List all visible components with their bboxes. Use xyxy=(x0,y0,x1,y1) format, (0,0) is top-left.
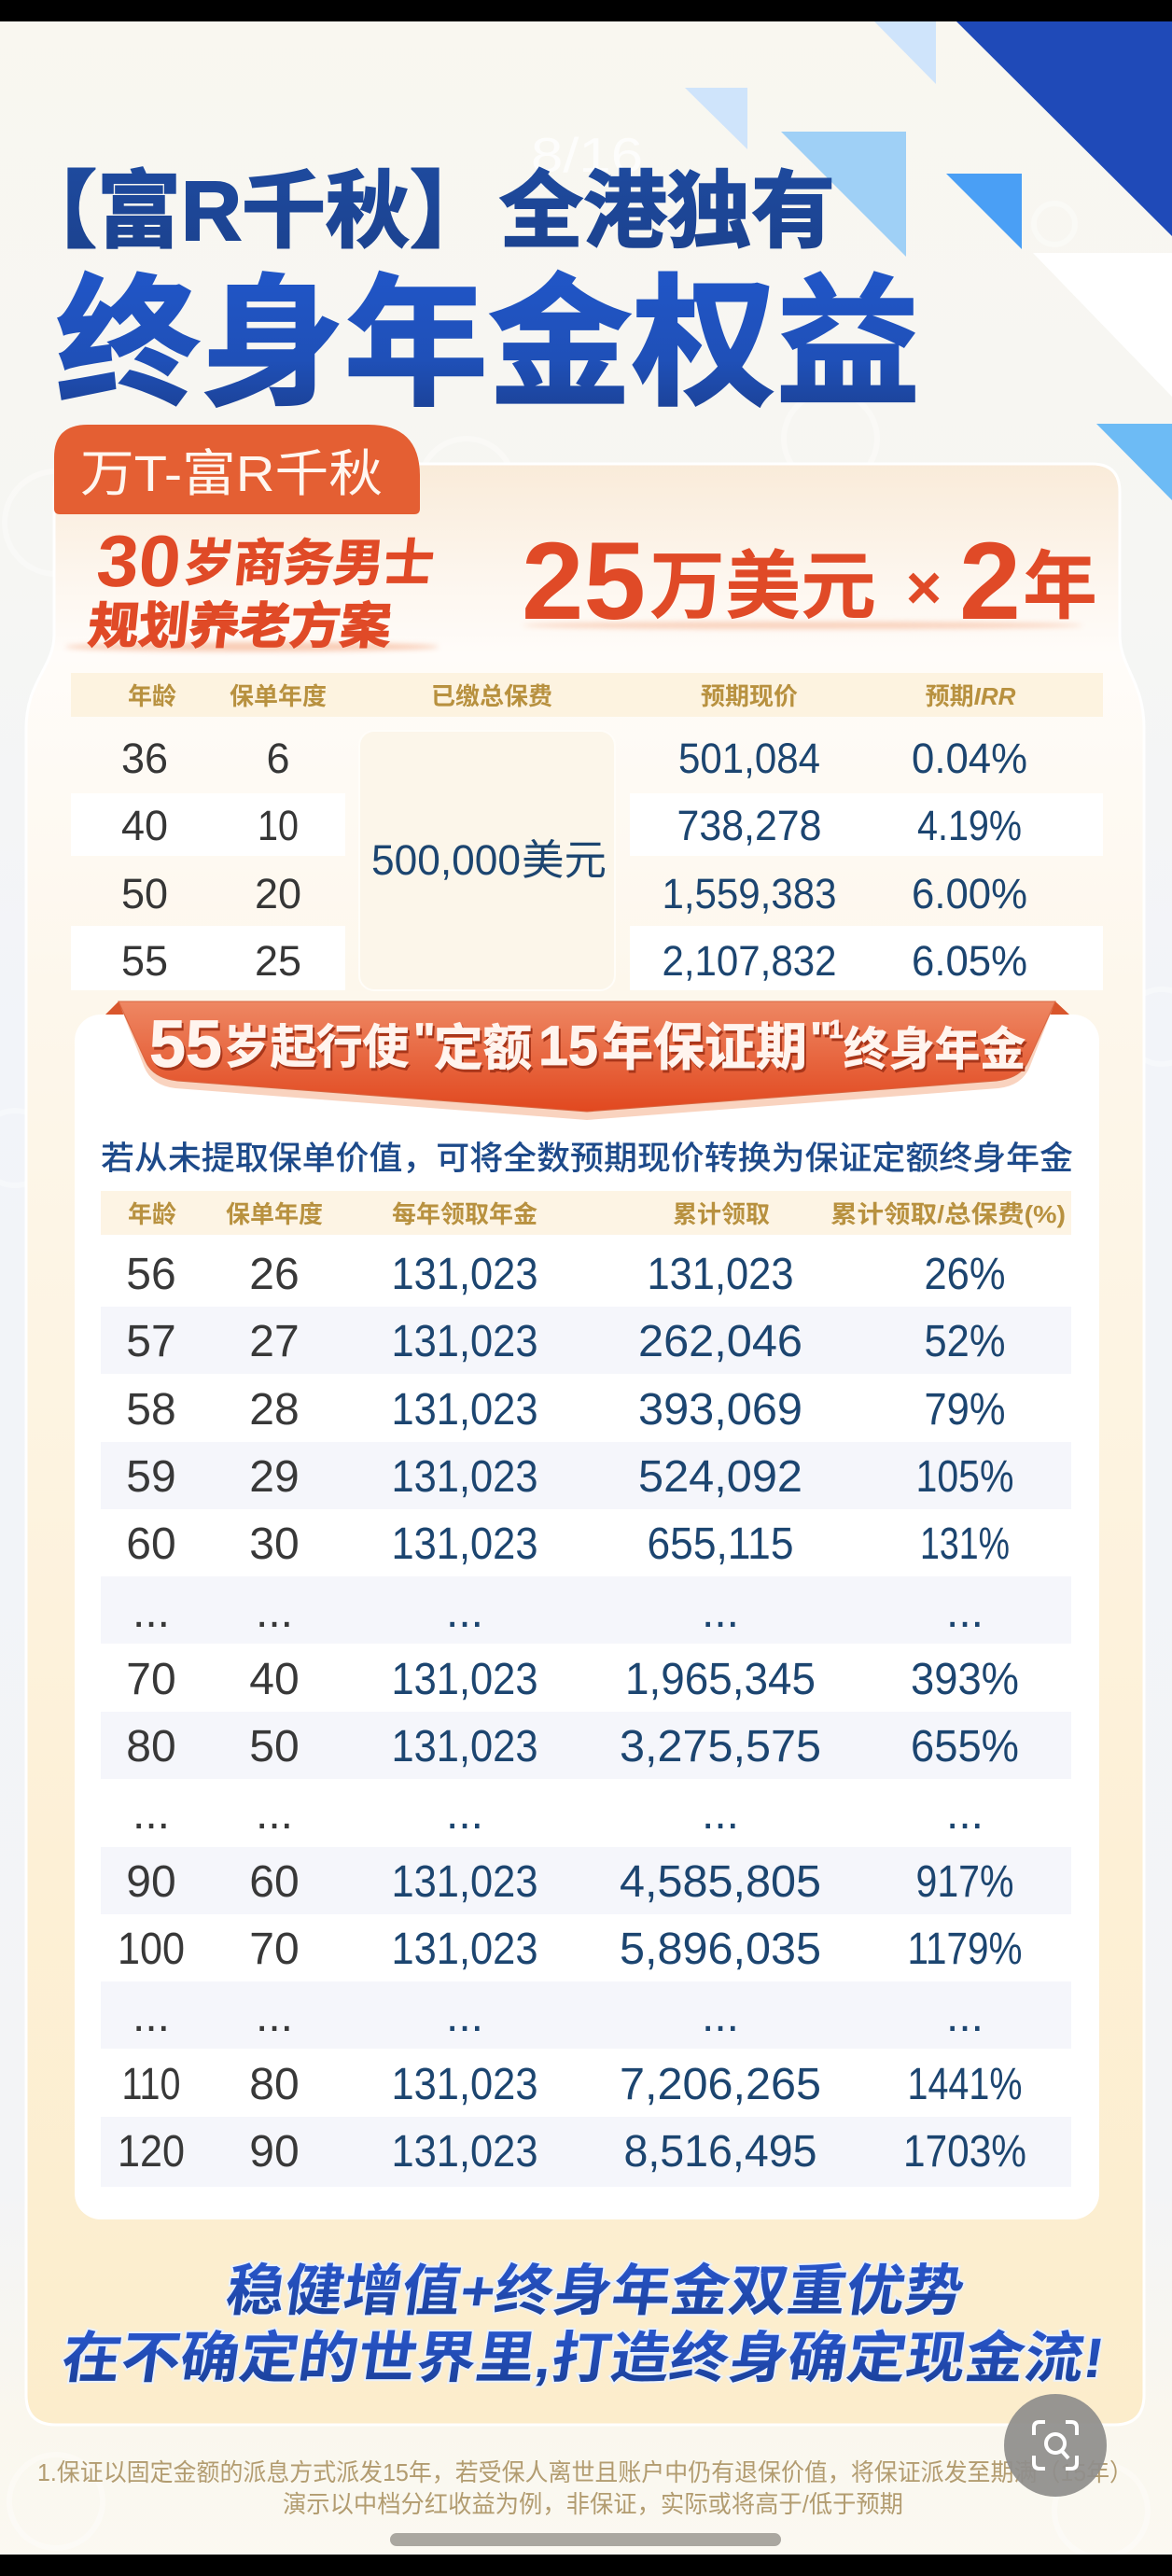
premium merged cell xyxy=(359,731,615,990)
ellipsis row xyxy=(133,1992,984,2041)
row age 120: 1703% xyxy=(903,2127,1026,2177)
decorative triangles xyxy=(685,21,1172,500)
row age 110: 131,023 xyxy=(392,2060,537,2109)
title xyxy=(13,165,920,424)
persona underline shadow xyxy=(65,642,439,651)
row age 40: 40 xyxy=(121,802,168,849)
row age 55 xyxy=(121,937,1027,985)
row age 59: 524,092 xyxy=(638,1452,802,1502)
table 2 header xyxy=(101,1191,1071,1235)
ellipsis row: ... xyxy=(133,1992,170,2041)
row age 80 xyxy=(126,1722,1019,1771)
row age 36: 6 xyxy=(266,735,290,782)
tab: product name: 万T-富R千秋 xyxy=(80,446,383,502)
row age 70: 40 xyxy=(249,1655,300,1704)
row age 80: 131,023 xyxy=(392,1722,537,1771)
plan persona xyxy=(65,520,439,654)
icon: image search button xyxy=(1004,2394,1107,2497)
table 2 header: 每年领取年金 xyxy=(392,1200,537,1228)
ellipsis row: ... xyxy=(946,1992,984,2041)
row age 55: 55 xyxy=(121,937,168,985)
banner glow xyxy=(119,1001,1055,1120)
row age 50: 20 xyxy=(255,870,301,917)
row age 90: 917% xyxy=(916,1857,1013,1907)
plan persona: 30 xyxy=(94,520,184,602)
banner heading: 15 xyxy=(538,1015,598,1077)
title line 1: 全港独有 xyxy=(499,165,835,259)
premium merged cell: 美元 xyxy=(522,836,607,884)
row age 100 xyxy=(118,1925,1023,1974)
ellipsis row: ... xyxy=(702,1789,739,1839)
title line 1: 【富R千秋】 xyxy=(13,165,494,259)
row age 90: 4,585,805 xyxy=(620,1857,821,1907)
plan amount: 25 xyxy=(522,520,646,643)
row age 60: 131% xyxy=(920,1519,1010,1569)
row age 36: 0.04% xyxy=(912,735,1027,782)
plan amount: × xyxy=(906,553,942,622)
slogan: 稳健增值+终身年金双重优势 xyxy=(222,2259,969,2322)
table 1: cash value xyxy=(71,673,1103,990)
row age 56 xyxy=(126,1250,1006,1299)
banner heading: 终身年金 xyxy=(844,1025,1026,1075)
plan amount: 万美元 xyxy=(649,545,876,628)
row age 90: 90 xyxy=(126,1857,176,1907)
table 1 header xyxy=(71,673,1103,717)
row age 50: 1,559,383 xyxy=(663,870,836,917)
ellipsis row: ... xyxy=(256,1992,293,2041)
row bands xyxy=(101,1307,1071,2187)
table 1 header: 预期现价 xyxy=(701,682,798,710)
table 1 header: 年龄 xyxy=(128,682,176,710)
row age 59 xyxy=(126,1452,1013,1502)
plan persona: 规划养老方案 xyxy=(86,599,394,654)
row age 57 xyxy=(126,1317,1006,1366)
ellipsis row: ... xyxy=(133,1789,170,1839)
row age 70: 70 xyxy=(126,1655,176,1704)
row age 57: 262,046 xyxy=(638,1317,802,1366)
banner heading: 1 xyxy=(829,1015,844,1043)
row age 40: 10 xyxy=(258,802,299,849)
footnote xyxy=(37,2458,1133,2518)
table 2 header: 保单年度 xyxy=(226,1200,323,1228)
scroll indicator xyxy=(390,2533,781,2546)
ellipsis row xyxy=(133,1588,984,1637)
plan amount: 年 xyxy=(1023,545,1097,628)
row age 120 xyxy=(118,2127,1026,2177)
row age 120: 120 xyxy=(118,2127,185,2177)
ellipsis row: ... xyxy=(946,1789,984,1839)
ellipsis row: ... xyxy=(446,1588,483,1637)
banner heading: 55 xyxy=(149,1008,222,1082)
row age 57: 27 xyxy=(249,1317,300,1366)
row age 55: 6.05% xyxy=(912,937,1027,985)
tab: product name xyxy=(54,425,420,514)
banner heading: 定额 xyxy=(434,1021,532,1076)
bottom black bar xyxy=(0,2555,1172,2576)
row age 100: 1179% xyxy=(907,1925,1023,1974)
row age 56: 26 xyxy=(249,1250,300,1299)
table 2 header: 累计领取/总保费(%) xyxy=(830,1200,1066,1228)
row age 60 xyxy=(126,1519,1010,1569)
row age 40: 4.19% xyxy=(917,802,1022,849)
ellipsis row: ... xyxy=(133,1588,170,1637)
row age 57: 52% xyxy=(924,1317,1006,1366)
row age 50: 50 xyxy=(121,870,168,917)
row age 80: 80 xyxy=(126,1722,176,1771)
banner heading: " xyxy=(413,1014,436,1066)
row age 70: 393% xyxy=(911,1655,1019,1704)
panel: main card xyxy=(26,464,1144,2425)
ellipsis row xyxy=(133,1789,984,1839)
banner xyxy=(105,1001,1069,1120)
row age 100: 5,896,035 xyxy=(620,1925,821,1974)
white diagonal band xyxy=(1033,253,1172,397)
row age 70: 131,023 xyxy=(392,1655,537,1704)
table 2: annuity payout xyxy=(101,1191,1071,2187)
banner heading: 年保证期 xyxy=(602,1018,807,1076)
row age 60: 655,115 xyxy=(648,1519,793,1569)
slogan: 在不确定的世界里,打造终身确定现金流! xyxy=(58,2326,1109,2389)
ellipsis row: ... xyxy=(702,1992,739,2041)
row age 55: 2,107,832 xyxy=(663,937,836,985)
row age 59: 29 xyxy=(249,1452,300,1502)
row age 60: 60 xyxy=(126,1519,176,1569)
row age 57: 57 xyxy=(126,1317,176,1366)
table 2 header: 累计领取 xyxy=(673,1200,770,1228)
row age 110: 80 xyxy=(249,2060,300,2109)
panel: annuity inner white card xyxy=(75,1015,1099,2219)
row age 120: 90 xyxy=(249,2127,300,2177)
row age 58: 28 xyxy=(249,1385,300,1435)
banner heading xyxy=(149,1008,1026,1082)
title line 2: 终身年金权益 xyxy=(56,265,920,424)
row age 59: 105% xyxy=(916,1452,1013,1502)
row age 40 xyxy=(121,802,1022,849)
plan amount xyxy=(522,520,1097,643)
footnote: 1.保证以固定金额的派息方式派发15年，若受保人离世且账户中仍有退保价值，将保证派发至期满（15年） xyxy=(37,2458,1133,2486)
table 2 header: 年龄 xyxy=(128,1200,176,1228)
row age 110: 1441% xyxy=(907,2060,1023,2109)
row age 59: 59 xyxy=(126,1452,176,1502)
plan amount: 2 xyxy=(959,520,1021,643)
row age 120: 131,023 xyxy=(392,2127,537,2177)
table 1 header: 已缴总保费 xyxy=(431,682,552,710)
page counter: 8/16 xyxy=(531,129,643,183)
row age 59: 131,023 xyxy=(392,1452,537,1502)
ellipsis row: ... xyxy=(946,1588,984,1637)
annuity subtitle: 若从未提取保单价值，可将全数预期现价转换为保证定额终身年金 xyxy=(101,1141,1073,1177)
row age 110: 7,206,265 xyxy=(620,2060,821,2109)
ellipsis row: ... xyxy=(256,1789,293,1839)
row age 60: 30 xyxy=(249,1519,300,1569)
table 1 header: 保单年度 xyxy=(230,682,327,710)
row age 100: 100 xyxy=(118,1925,185,1974)
ellipsis row: ... xyxy=(256,1588,293,1637)
row age 56: 131,023 xyxy=(648,1250,793,1299)
row age 60: 131,023 xyxy=(392,1519,537,1569)
table 1 header: 预期IRR xyxy=(926,682,1016,710)
row age 100: 131,023 xyxy=(392,1925,537,1974)
row age 40: 738,278 xyxy=(677,802,821,849)
row age 90: 60 xyxy=(249,1857,300,1907)
row age 56: 56 xyxy=(126,1250,176,1299)
footnote: 演示以中档分红收益为例，非保证，实际或将高于/低于预期 xyxy=(283,2490,903,2518)
row age 80: 50 xyxy=(249,1722,300,1771)
ellipsis row: ... xyxy=(702,1588,739,1637)
ellipsis row: ... xyxy=(446,1789,483,1839)
row age 58: 79% xyxy=(924,1385,1006,1435)
banner heading: " xyxy=(810,1013,832,1065)
amount underline shadow xyxy=(523,622,1082,629)
row age 36: 36 xyxy=(121,735,168,782)
row age 110: 110 xyxy=(121,2060,181,2109)
banner ribbon xyxy=(119,1001,1055,1112)
row age 36: 501,084 xyxy=(678,735,820,782)
banner ears xyxy=(105,1001,125,1015)
row age 80: 3,275,575 xyxy=(620,1722,821,1771)
top black bar xyxy=(0,0,1172,21)
row age 56: 26% xyxy=(924,1250,1006,1299)
row age 58: 58 xyxy=(126,1385,176,1435)
row age 90: 131,023 xyxy=(392,1857,537,1907)
row age 36 xyxy=(121,735,1027,782)
premium merged cell: 500,000 xyxy=(371,836,521,884)
row age 120: 8,516,495 xyxy=(623,2127,817,2177)
row age 50 xyxy=(121,870,1027,917)
banner heading: 岁起行使 xyxy=(224,1021,409,1073)
plan persona: 岁商务男士 xyxy=(181,536,437,592)
ellipsis row: ... xyxy=(446,1992,483,2041)
row age 58 xyxy=(126,1385,1006,1435)
row age 55: 25 xyxy=(255,937,301,985)
slogan xyxy=(58,2259,1109,2389)
row age 100: 70 xyxy=(249,1925,300,1974)
row age 80: 655% xyxy=(911,1722,1019,1771)
row age 70: 1,965,345 xyxy=(625,1655,816,1704)
row age 57: 131,023 xyxy=(392,1317,537,1366)
row bands xyxy=(71,793,1103,990)
row age 110 xyxy=(121,2060,1023,2109)
row age 50: 6.00% xyxy=(912,870,1027,917)
row age 58: 393,069 xyxy=(638,1385,802,1435)
row age 56: 131,023 xyxy=(392,1250,537,1299)
row age 70 xyxy=(126,1655,1019,1704)
row age 90 xyxy=(126,1857,1013,1907)
row age 58: 131,023 xyxy=(392,1385,537,1435)
